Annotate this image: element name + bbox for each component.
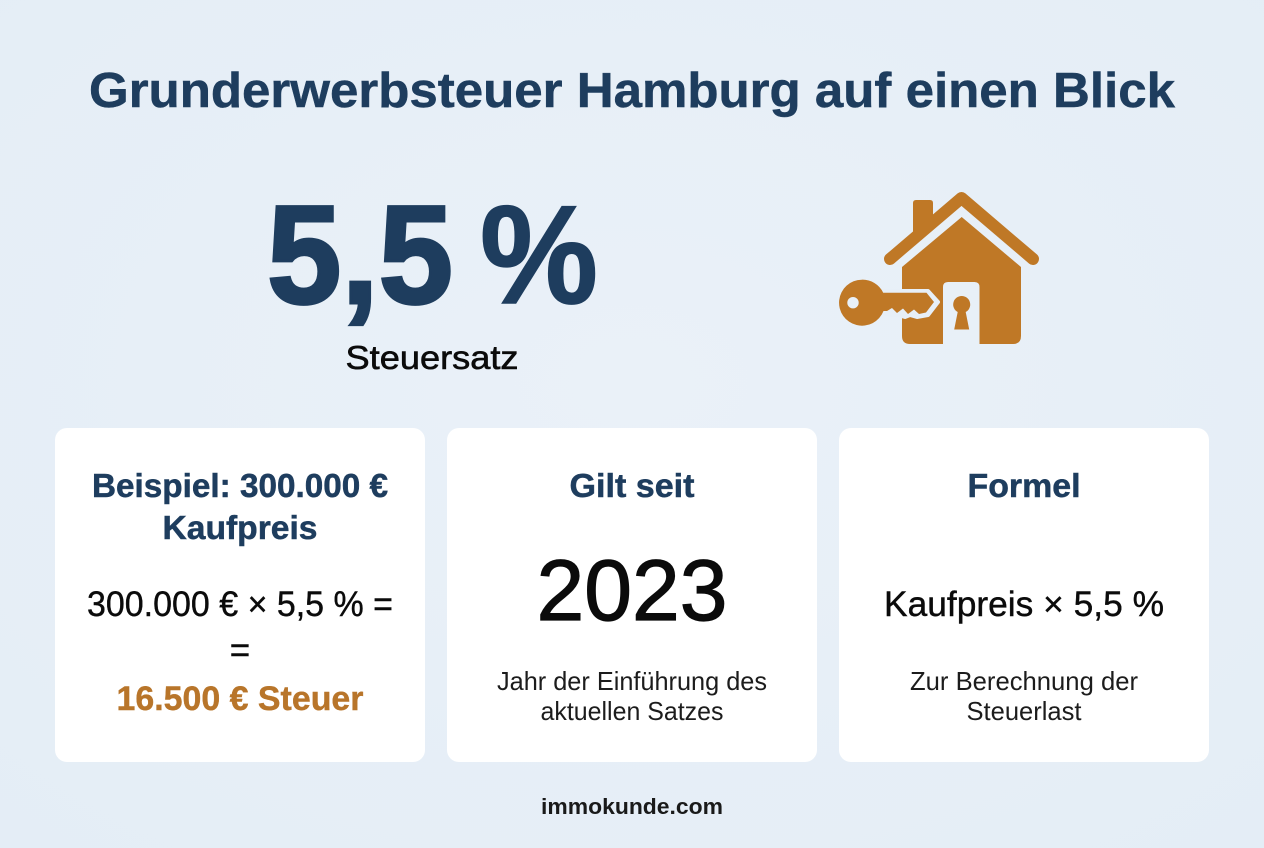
rate value: 5,5 [267, 176, 453, 333]
key [839, 280, 938, 326]
formula: Kaufpreis × 5,5 % [884, 585, 1164, 624]
panel: valid since: aktuellen Satzes [540, 696, 724, 726]
key figure: tax rate [267, 176, 598, 376]
result: 16.500 € Steuer [116, 680, 364, 718]
formula description: Zur Berechnung der [910, 666, 1138, 696]
calculation: 300.000 € × 5,5 % = [87, 585, 393, 624]
rate value [267, 176, 598, 333]
example heading: Beispiel: 300.000 € [92, 467, 388, 504]
chimney [913, 200, 933, 245]
roof [890, 198, 1033, 259]
panel: example: = [230, 631, 250, 670]
house body [902, 217, 1021, 344]
formula heading: Formel [968, 467, 1080, 504]
footer source: immokunde.com [541, 794, 723, 819]
rate label: Steuersatz [346, 339, 518, 376]
panel: formula [839, 428, 1209, 762]
icon: house with key [839, 198, 1033, 344]
year: 2023 [536, 543, 728, 639]
year description: Jahr der Einführung des [497, 666, 767, 696]
panel: example [55, 428, 425, 762]
panel: valid since [447, 428, 817, 762]
panel: example: Kaufpreis [162, 509, 318, 546]
title: Grunderwerbsteuer Hamburg auf einen Blick [89, 64, 1176, 118]
keyhole [953, 296, 970, 330]
panel: formula: Steuerlast [966, 696, 1082, 726]
valid since heading: Gilt seit [570, 467, 695, 504]
rate value: % [480, 176, 598, 333]
